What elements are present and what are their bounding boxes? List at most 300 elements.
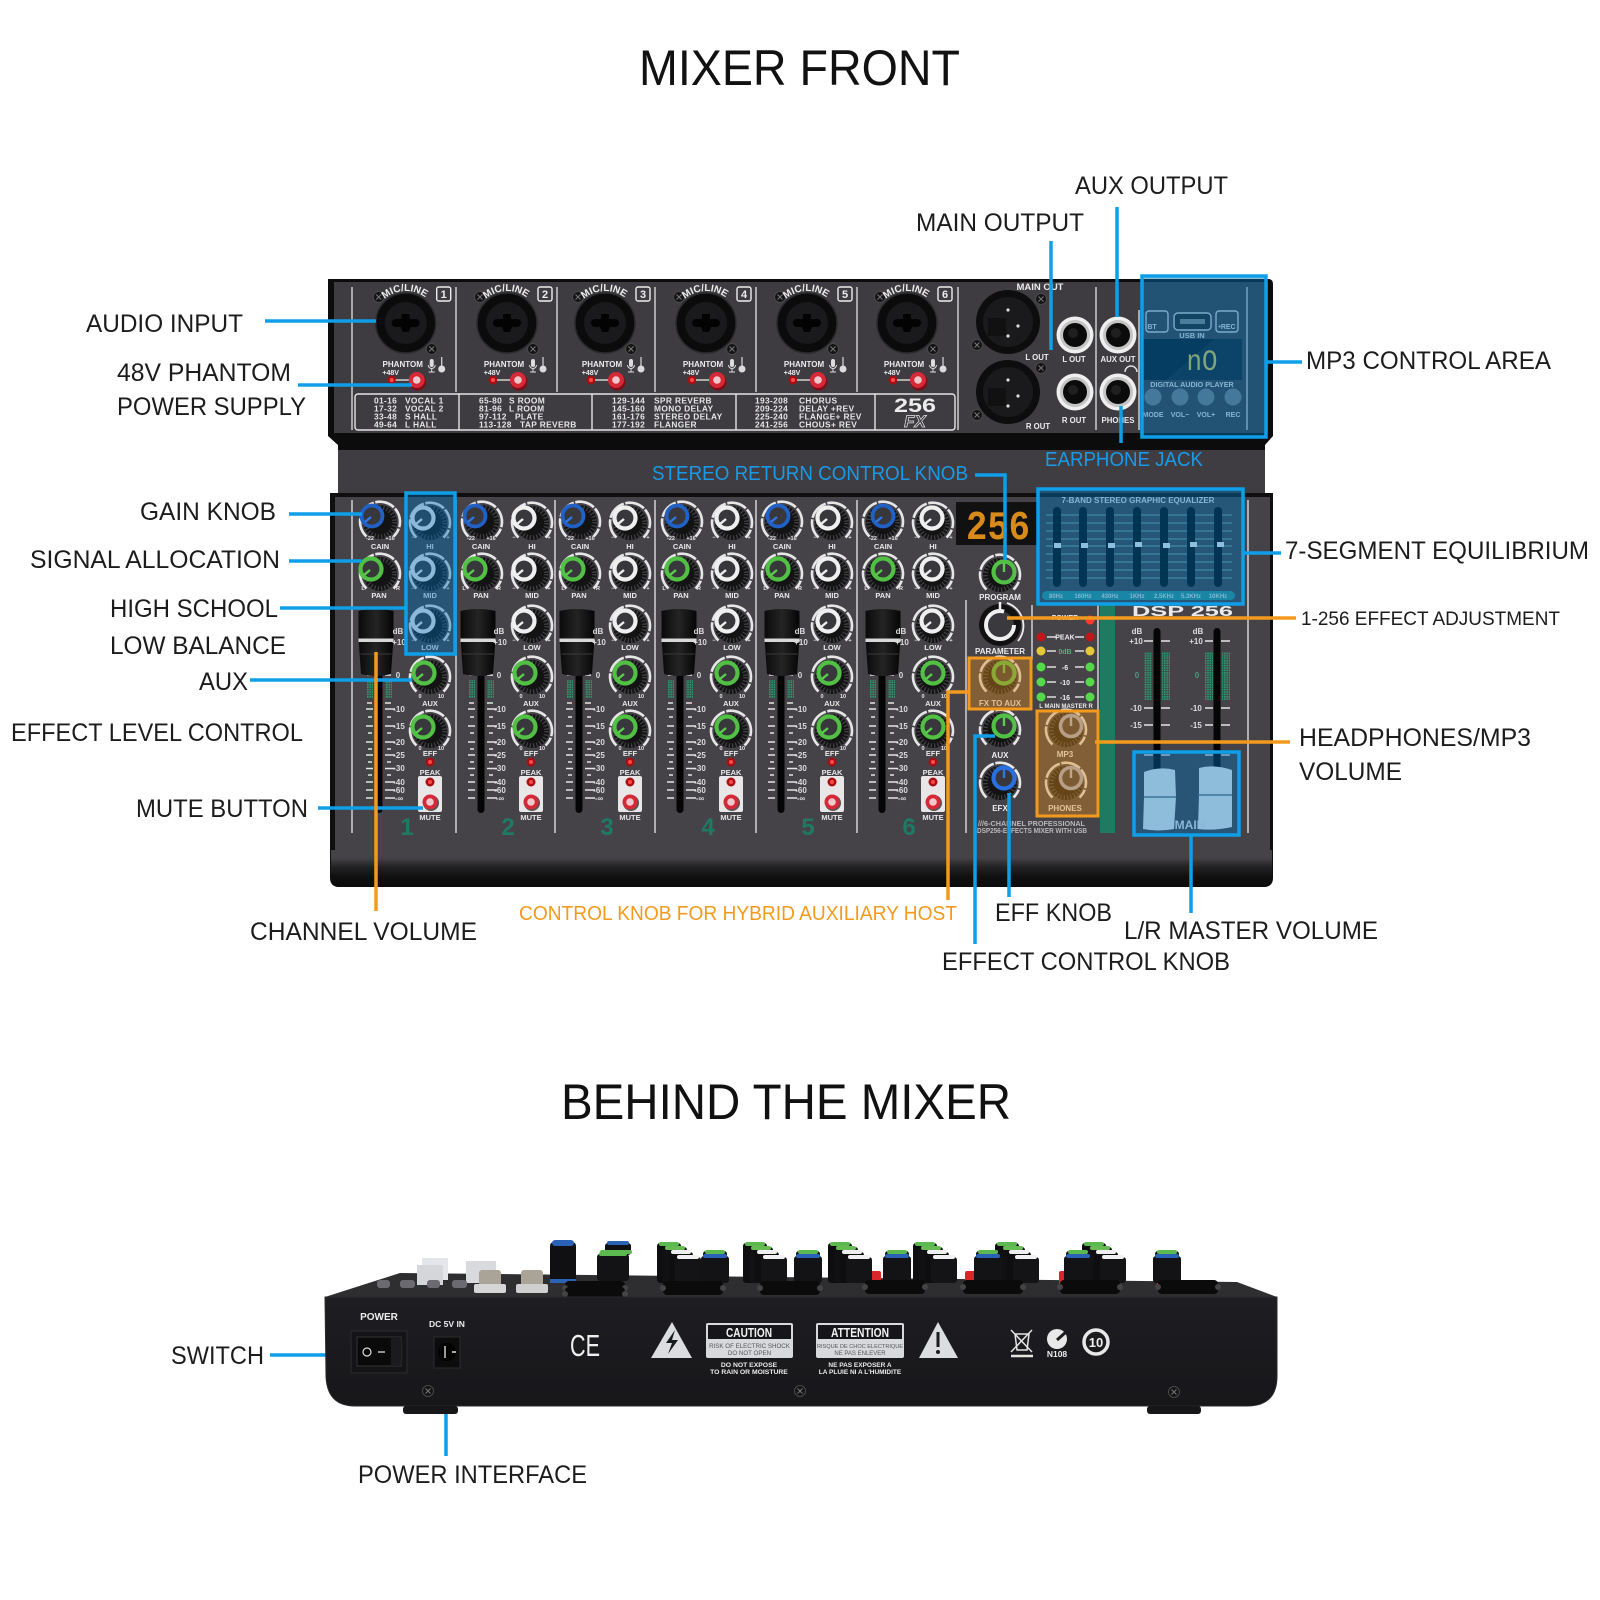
- seven band equalizer: 160Hz: [1074, 594, 1092, 600]
- input channel 2: MIC/LINE: [482, 284, 530, 298]
- channel strip 4: LOW: [723, 643, 742, 652]
- input channel 2: +48V: [484, 370, 501, 377]
- channel strip 3: −: [611, 535, 615, 541]
- channel strip 5: -22: [768, 536, 776, 542]
- input channel 1: PHANTOM: [383, 360, 423, 369]
- MP3 player controls: MODE: [1142, 412, 1164, 419]
- channel strip 5: R: [798, 586, 802, 592]
- input channel 6: PHANTOM: [884, 360, 924, 369]
- channel strip 1: 0: [396, 671, 401, 680]
- channel strip 4: R: [697, 586, 701, 592]
- channel strip 2: EFF: [524, 749, 538, 758]
- label: L/R master volume: L/R MASTER VOLUME: [1124, 917, 1378, 945]
- input channel 6: +48V: [884, 370, 901, 377]
- channel strip 3: EFF: [623, 749, 637, 758]
- effects preset table: 01-16: [374, 396, 397, 406]
- channel strip 1: -10: [393, 705, 405, 714]
- channel strip 5: EFF: [825, 749, 839, 758]
- panel: lower control surface: [330, 493, 1273, 887]
- main master LED meter: [1036, 615, 1094, 710]
- main outputs and jacks: R OUT: [1026, 422, 1050, 431]
- master faders: dB: [1132, 627, 1143, 636]
- main outputs and jacks: L OUT: [1025, 353, 1049, 362]
- master faders: 0: [1195, 671, 1200, 680]
- effects preset table: 113-128: [479, 420, 512, 430]
- effects preset table: 225-240: [755, 412, 788, 422]
- channel strip 1: -30: [393, 764, 405, 773]
- channel strip 1: -20: [393, 738, 405, 747]
- channel strip 1: LOW: [421, 643, 440, 652]
- channel strip 3: LOW: [621, 643, 640, 652]
- highlight: high mid low knobs: [406, 493, 455, 654]
- channel strip 6: AUX: [925, 699, 941, 708]
- rear panel body: [325, 1297, 1277, 1406]
- input channel 2: 2: [542, 289, 548, 301]
- effects preset table: 65-80: [479, 396, 502, 406]
- power switch: [351, 1312, 407, 1373]
- effects preset table: S HALL: [405, 412, 437, 422]
- channel strip 2: -25: [494, 751, 506, 760]
- channel strip 5: PAN: [774, 591, 790, 600]
- channel strip 3: +: [646, 535, 650, 541]
- channel strip 1: -15: [393, 722, 405, 731]
- MP3 player controls: [1142, 311, 1242, 419]
- channel strip 4: 4: [701, 814, 715, 841]
- channel strip 4: CAIN: [673, 542, 691, 551]
- effects preset table: [355, 394, 955, 431]
- channel strip 2: L: [462, 586, 466, 592]
- attention label: ATTENTION: [831, 1325, 889, 1340]
- channel strip 2: LOW: [523, 643, 542, 652]
- label: MP3 control area: MP3 CONTROL AREA: [1306, 347, 1551, 375]
- channel strip 6: -25: [896, 751, 908, 760]
- channel strip 1: 1: [400, 814, 414, 841]
- title: behind the mixer: BEHIND THE MIXER: [561, 1074, 1011, 1130]
- channel strip 4: +16: [686, 536, 696, 542]
- channel strip 5: -10: [795, 705, 807, 714]
- channel strip 4: -15: [694, 722, 706, 731]
- seven band equalizer: 80Hz: [1049, 594, 1063, 600]
- seven band equalizer: 10KHz: [1209, 594, 1227, 600]
- channel strip 5: LOW: [823, 643, 842, 652]
- channel strip 3: 10: [638, 746, 644, 752]
- channel strip 6: [863, 502, 953, 841]
- channel strip 6: +10: [895, 638, 909, 647]
- channel strip 3: [560, 502, 650, 841]
- channel strip 6: +16: [888, 536, 898, 542]
- main master LED meter: -16: [1060, 695, 1070, 702]
- channel strip 6: CAIN: [874, 542, 892, 551]
- channel strip 3: -22: [566, 536, 574, 542]
- channel strip 4: +: [747, 586, 751, 592]
- channel strip 3: +10: [592, 638, 606, 647]
- effects preset table: TAP REVERB: [520, 420, 577, 430]
- input channel 4: MIC/LINE: [681, 284, 729, 298]
- main outputs and jacks: MAIN OUT: [1017, 282, 1064, 293]
- effects preset table: FLANGE+ REV: [799, 412, 862, 422]
- channel strip 3: 0: [618, 746, 622, 752]
- input channel 3: MIC/LINE: [580, 284, 628, 298]
- effects preset table: CHORUS: [799, 396, 837, 406]
- channel strip 1: 10: [438, 746, 444, 752]
- channel strip 6: 0: [899, 671, 904, 680]
- label: power interface: POWER INTERFACE: [358, 1461, 587, 1489]
- label: aux: AUX: [199, 668, 248, 696]
- channel strip 3: -30: [593, 764, 605, 773]
- channel strip 4: 10: [739, 746, 745, 752]
- channel strip 6: +: [949, 535, 953, 541]
- effects preset table: L HALL: [405, 420, 437, 430]
- effects knobs: FX TO AUX: [979, 699, 1022, 708]
- MP3 player controls: USB IN: [1179, 331, 1205, 340]
- input channel 6: MIC/LINE: [882, 284, 930, 298]
- effects preset table: 193-208: [755, 396, 788, 406]
- channel strip 2: -60: [494, 786, 506, 795]
- panel: middle strip: [338, 450, 1265, 495]
- label: gain knob: GAIN KNOB: [140, 498, 276, 526]
- warning: exclamation triangle: [919, 1322, 958, 1358]
- channel strip 3: PAN: [571, 591, 587, 600]
- channel strip 5: 0: [798, 671, 803, 680]
- effects preset table: 256: [894, 396, 936, 417]
- channel strip 2: 10: [539, 746, 545, 752]
- channel strip 2: 0: [519, 746, 523, 752]
- main master LED meter: POWER: [1052, 615, 1078, 622]
- channel strip 5: 5: [801, 814, 815, 841]
- effects knobs: PARAMETER: [975, 647, 1025, 656]
- MP3 player controls: VOL+: [1197, 412, 1215, 419]
- effects preset table: VOCAL 2: [405, 404, 444, 414]
- label: headphones/MP3 volume: HEADPHONES/MP3: [1299, 724, 1531, 752]
- highlight: master faders: [1134, 752, 1239, 835]
- channel strip 3: -15: [593, 722, 605, 731]
- channel strip 1: −: [411, 638, 415, 644]
- channel strip 1: -22: [366, 536, 374, 542]
- channel strip 1: R: [396, 586, 400, 592]
- channel strip 2: dB: [494, 627, 505, 636]
- channel strip 5: dB: [795, 627, 806, 636]
- label: effect control knob: EFFECT CONTROL KNOB: [942, 948, 1230, 976]
- channel strip 2: MID: [525, 591, 539, 600]
- channel strip 2: +10: [493, 638, 507, 647]
- input channel 4: 4: [741, 289, 748, 301]
- channel strip 5: 0: [820, 694, 824, 700]
- channel strip 4: dB: [694, 627, 705, 636]
- label: earphone jack: EARPHONE JACK: [1045, 449, 1204, 471]
- label: high school low balance: HIGH SCHOOL: [110, 595, 278, 623]
- channel strip 5: MID: [825, 591, 839, 600]
- channel strip 5: 0: [820, 746, 824, 752]
- input channel 5: PHANTOM: [784, 360, 824, 369]
- channel strip 3: 10: [638, 694, 644, 700]
- channel strip 5: CAIN: [773, 542, 791, 551]
- label: main output: MAIN OUTPUT: [916, 209, 1084, 237]
- input channel 5: [774, 284, 853, 390]
- channel strip 5: 10: [840, 694, 846, 700]
- headphone and MP3 knobs: [1046, 710, 1086, 813]
- channel strip 2: +: [547, 535, 551, 541]
- master faders: MAIN: [1175, 818, 1205, 832]
- label: signal allocation: SIGNAL ALLOCATION: [30, 546, 280, 574]
- input channel 6: 6: [942, 289, 948, 301]
- MP3 player controls: BT: [1147, 324, 1157, 331]
- channel strip 6: -20: [896, 738, 908, 747]
- effects preset table: CHOUS+ REV: [799, 420, 857, 430]
- channel strip 5: 10: [840, 746, 846, 752]
- input channel 5: MIC/LINE: [782, 284, 830, 298]
- channel strip 4: -∞: [696, 794, 704, 803]
- main outputs and jacks: [972, 282, 1137, 431]
- label: eff knob: EFF KNOB: [995, 899, 1112, 927]
- channel strip 6: MID: [926, 591, 940, 600]
- effects preset table: PLATE: [515, 412, 544, 422]
- label: channel volume: CHANNEL VOLUME: [250, 918, 477, 946]
- channel strip 4: +10: [693, 638, 707, 647]
- channel strip 5: −: [813, 586, 817, 592]
- label: switch: SWITCH: [171, 1342, 264, 1370]
- channel strip 6: PAN: [875, 591, 891, 600]
- channel strip 5: -60: [795, 786, 807, 795]
- input channel 2: [474, 284, 553, 390]
- channel strip 6: dB: [896, 627, 907, 636]
- label: headphones/MP3 volume: VOLUME: [1299, 758, 1402, 786]
- channel strip 1: +10: [392, 638, 406, 647]
- label: high school low balance: [110, 595, 286, 660]
- channel strip 3: MUTE: [619, 813, 641, 822]
- master faders: +10: [1129, 637, 1143, 646]
- channel strip 2: −: [512, 535, 516, 541]
- photo: mixer rear view: [325, 1240, 1277, 1414]
- main master LED meter: PEAK: [1055, 634, 1075, 642]
- main outputs and jacks: PHONES: [1102, 416, 1134, 425]
- CE mark: CE: [570, 1328, 600, 1363]
- green stripe: [1100, 605, 1115, 833]
- main outputs and jacks: L OUT: [1062, 355, 1086, 364]
- channel strip 2: -15: [494, 722, 506, 731]
- channel strip 4: -20: [694, 738, 706, 747]
- channel strip 6: −: [914, 535, 918, 541]
- model caption: ///6-CHANNEL PROFESSIONAL: [978, 819, 1085, 828]
- channel strip 2: -10: [494, 705, 506, 714]
- channel strip 1: MID: [423, 591, 437, 600]
- channel strip 4: MUTE: [720, 813, 742, 822]
- effects preset table: 97-112: [479, 412, 507, 422]
- caution label: [706, 1323, 793, 1376]
- channel strip 1: +: [446, 535, 450, 541]
- channel strip 6: R: [899, 586, 903, 592]
- channel strip 2: −: [512, 586, 516, 592]
- effects preset table: 161-176: [612, 412, 645, 422]
- effects preset table: DELAY +REV: [799, 404, 854, 414]
- channel strip 6: 10: [941, 694, 947, 700]
- channel strip 6: 0: [921, 694, 925, 700]
- channel strip 5: −: [813, 638, 817, 644]
- channel strip 6: L: [864, 586, 868, 592]
- channel strip 3: MID: [623, 591, 637, 600]
- master faders: dB: [1193, 627, 1204, 636]
- effects knobs: PROGRAM: [979, 593, 1021, 602]
- leader lines: orange callouts: [376, 618, 1296, 911]
- effects preset table: FX: [904, 412, 928, 431]
- channel strip 4: 0: [719, 746, 723, 752]
- channel strip 4: -25: [694, 751, 706, 760]
- effects knobs: AUX: [992, 751, 1009, 760]
- channel strip 2: −: [512, 638, 516, 644]
- channel strip 2: -40: [494, 778, 506, 787]
- channel strip 6: -∞: [898, 794, 906, 803]
- channel strip 4: AUX: [723, 699, 739, 708]
- channel strip 2: AUX: [523, 699, 539, 708]
- channel strip 4: 10: [739, 694, 745, 700]
- seven band equalizer: 5.3KHz: [1181, 594, 1201, 600]
- highlight: MP3 control area: [1142, 276, 1266, 437]
- channel strip 2: 2: [501, 814, 515, 841]
- input channel 3: 3: [640, 289, 646, 301]
- icon: 10 year recycling mark: [1084, 1330, 1108, 1354]
- channel strip 4: -40: [694, 778, 706, 787]
- channel strip 1: −: [411, 586, 415, 592]
- attention label: [816, 1323, 904, 1376]
- channel strip 4: MID: [725, 591, 739, 600]
- effects preset table: S ROOM: [509, 396, 545, 406]
- channel strip 6: +: [949, 638, 953, 644]
- channel strip 1: +: [446, 638, 450, 644]
- channel strip 1: 10: [438, 694, 444, 700]
- channel strip 1: 0: [418, 694, 422, 700]
- channel strip 4: [662, 502, 752, 841]
- input channel 1: [373, 284, 452, 390]
- channel strip 1: MUTE: [419, 813, 441, 822]
- channel strip 3: -40: [593, 778, 605, 787]
- MP3 player controls: REC: [1226, 412, 1240, 419]
- MP3 player controls: VOL−: [1171, 412, 1189, 419]
- main master LED meter: 0dB: [1058, 649, 1072, 656]
- channel strip 3: +16: [585, 536, 595, 542]
- highlight: fx to aux knob: [969, 658, 1031, 709]
- channel strip 3: L: [561, 586, 565, 592]
- channel strip 4: −: [712, 586, 716, 592]
- effects preset table: 49-64: [374, 420, 397, 430]
- channel strip 6: -30: [896, 764, 908, 773]
- seven band equalizer: 1KHz: [1129, 594, 1145, 600]
- channel strip 2: -20: [494, 738, 506, 747]
- seven band equalizer: 2.5KHz: [1154, 594, 1174, 600]
- channel strip 4: EFF: [724, 749, 738, 758]
- icon: C-tick N108: N108: [1047, 1349, 1067, 1359]
- channel strip 5: HI: [828, 542, 836, 551]
- channel strip 1: +: [446, 586, 450, 592]
- caution label: DO NOT EXPOSE: [721, 1362, 778, 1369]
- channel strip 2: 0: [497, 671, 502, 680]
- highlight: headphones and MP3 knobs: [1037, 711, 1098, 816]
- channel strip 3: +: [646, 638, 650, 644]
- input channel 3: +48V: [582, 370, 599, 377]
- channel strip 1: -25: [393, 751, 405, 760]
- label: 48V phantom power supply: POWER SUPPLY: [117, 393, 306, 421]
- effects preset table: VOCAL 1: [405, 396, 444, 406]
- master faders: +10: [1189, 637, 1203, 646]
- channel strip 1: -40: [393, 778, 405, 787]
- icon: 10 year recycling mark: 10: [1089, 1335, 1103, 1350]
- channel strip 2: -22: [467, 536, 475, 542]
- main outputs and jacks: AUX OUT: [1100, 355, 1136, 364]
- input channel 3: [572, 284, 651, 390]
- input channel 6: [874, 284, 953, 390]
- channel strip 5: -15: [795, 722, 807, 731]
- power interface: [429, 1319, 465, 1368]
- input channel 5: +48V: [784, 370, 801, 377]
- caution label: RISK OF ELECTRIC SHOCK: [709, 1343, 791, 1350]
- headphone and MP3 knobs: MP3: [1057, 750, 1074, 759]
- icon: C-tick N108: [1047, 1329, 1067, 1359]
- channel strip 6: LOW: [924, 643, 943, 652]
- channel strip 3: HI: [626, 542, 634, 551]
- label: control knob for hybrid auxiliary host: CONTROL KNOB FOR HYBRID AUXILIARY HOST: [519, 903, 957, 925]
- caution label: DO NOT OPEN: [728, 1350, 771, 1357]
- channel strip 6: 0: [921, 746, 925, 752]
- channel strip 6: +: [949, 586, 953, 592]
- channel strip 5: +: [848, 638, 852, 644]
- effects preset table: SPR REVERB: [654, 396, 712, 406]
- input channel 2: PHANTOM: [484, 360, 524, 369]
- channel strip 3: -60: [593, 786, 605, 795]
- effects knobs: [975, 555, 1025, 813]
- channel strip 4: 0: [719, 694, 723, 700]
- seven band equalizer: [1042, 496, 1235, 600]
- channel strip 2: HI: [528, 542, 536, 551]
- channel strip 3: +: [646, 586, 650, 592]
- screws: [422, 1386, 1180, 1398]
- effects preset table: 81-96: [479, 404, 502, 414]
- input channel 5: 5: [842, 289, 848, 301]
- channel strip 5: +16: [787, 536, 797, 542]
- channel strip 1: -60: [393, 786, 405, 795]
- channel strip 5: -20: [795, 738, 807, 747]
- input channel 4: +48V: [683, 370, 700, 377]
- channel strip 3: AUX: [622, 699, 638, 708]
- label: audio input: AUDIO INPUT: [86, 310, 243, 338]
- effects preset table: FLANGER: [654, 420, 697, 430]
- label: high school low balance: LOW BALANCE: [110, 632, 286, 660]
- channel strip 3: 3: [600, 814, 614, 841]
- channel strip 3: R: [596, 586, 600, 592]
- channel strip 3: -25: [593, 751, 605, 760]
- channel strip 3: −: [611, 586, 615, 592]
- channel strip 2: PEAK: [521, 768, 542, 777]
- channel strip 6: -15: [896, 722, 908, 731]
- channel strip 5: +: [848, 535, 852, 541]
- effects preset table: 209-224: [755, 404, 788, 414]
- effects knobs: EFX: [992, 804, 1008, 813]
- label: effect level control: EFFECT LEVEL CONTROL: [11, 719, 303, 747]
- channel strip 1: HI: [426, 542, 434, 551]
- channel strip 2: 10: [539, 694, 545, 700]
- channel strip 5: -40: [795, 778, 807, 787]
- top surface with knobs: [325, 1240, 1277, 1301]
- effects preset table: 33-48: [374, 412, 397, 422]
- channel strip 2: +16: [486, 536, 496, 542]
- channel strip 2: 0: [519, 694, 523, 700]
- label: 48V phantom power supply: [117, 359, 306, 421]
- effects preset table: 241-256: [755, 420, 788, 430]
- DSP 256 logo: DSP 256: [1132, 603, 1233, 620]
- master faders: -15: [1130, 721, 1142, 730]
- main master LED meter: L MAIN MASTER R: [1039, 704, 1093, 710]
- effects preset table: 177-192: [612, 420, 645, 430]
- caution label: TO RAIN OR MOISTURE: [710, 1369, 788, 1376]
- channel strip 3: -∞: [595, 794, 603, 803]
- channel strip 2: PAN: [473, 591, 489, 600]
